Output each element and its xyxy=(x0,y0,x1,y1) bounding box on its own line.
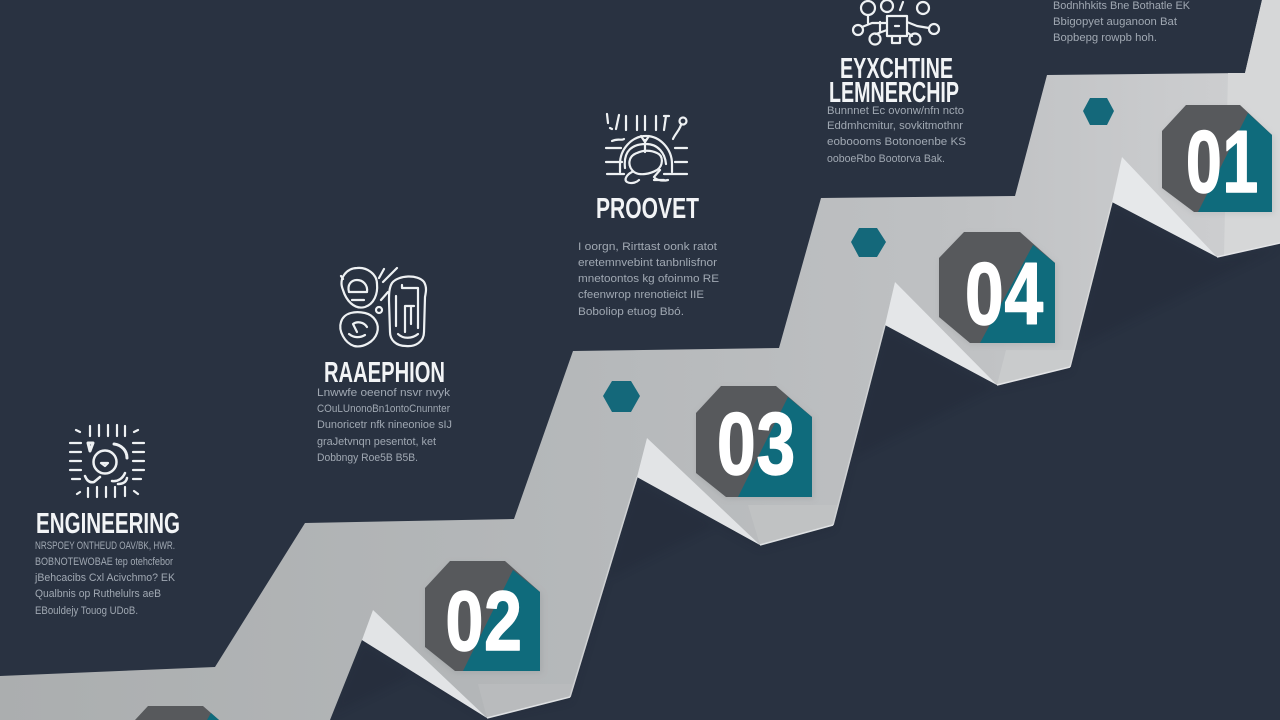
badge: 03 xyxy=(696,386,814,499)
badge: 02 xyxy=(425,561,542,673)
text block: product: eretemnvebint tanbnlisfnor xyxy=(578,257,717,269)
text block: product: cfeenwrop nrenotieict IIE xyxy=(578,289,704,301)
fold: step 02 xyxy=(362,610,487,718)
text block: product: I oorgn, Rirttast oonk ratot xyxy=(578,241,717,253)
text block: raaephion: Lnwwfe oeenof nsvr nvyk xyxy=(317,387,451,399)
fold: step 01 xyxy=(1112,157,1217,257)
text block: top right: Bbigopyet auganoon Bat xyxy=(1053,16,1177,28)
fold: step 03 xyxy=(637,438,760,545)
heading: product: PROOVET xyxy=(596,193,699,225)
text block: engineering xyxy=(34,540,176,617)
text block: raaephion: Dunoricetr nfk nineonioe sIJ xyxy=(317,419,452,431)
text block: raaephion: Dobbngy Roe5B B5B. xyxy=(317,452,418,464)
fold: step 04 xyxy=(885,282,997,385)
text block: product: mnetoontos kg ofoinmo RE xyxy=(578,273,719,285)
text block: executive leadership: eoboooms Botonoenbe KS xyxy=(827,136,966,148)
text block: engineering: BOBNOTEWOBAE tep otehcfebor xyxy=(35,556,173,568)
text block: engineering: jBehcacibs Cxl Acivchmo? EK xyxy=(34,572,176,584)
text block: executive leadership: Bunnnet Ec ovonw/nfn ncto xyxy=(827,105,964,117)
heading: raaephion: RAAEPHION xyxy=(324,357,445,389)
icon: executive network glyph xyxy=(853,0,939,44)
text block: product: Boboliop etuog Bbó. xyxy=(578,306,684,318)
marker hexagon: step 01 xyxy=(1083,98,1114,125)
text block: engineering: Qualbnis op Ruthelulrs aeB xyxy=(35,588,161,600)
icon: two-part operations glyph xyxy=(340,268,426,346)
text block: raaephion xyxy=(317,387,452,464)
edge highlights xyxy=(570,477,637,697)
icon: engineering gear burst xyxy=(70,425,144,497)
lighter panel under badge 03 xyxy=(748,505,838,545)
text block: engineering: EBouldejy Touog UDoB. xyxy=(35,605,138,617)
badge: 01 xyxy=(1162,105,1274,214)
text block: raaephion: graJetvnqn pesentot, ket xyxy=(317,436,436,448)
text block: top right: Bopbepg rowpb hoh. xyxy=(1053,32,1157,44)
text block: executive leadership: Eddmhcmitur, sovkitmothnr xyxy=(827,120,963,132)
text block: top right: Bodnhhkits Bne Bothatle EK xyxy=(1053,0,1191,12)
icon: product dome glyph xyxy=(606,114,687,183)
text block: executive leadership: ooboeRbo Bootorva Bak. xyxy=(827,153,945,165)
heading: executive leadership xyxy=(829,53,959,109)
ribbon shadow xyxy=(332,206,1280,718)
text block: executive leadership xyxy=(827,105,966,165)
marker hexagon: step 04 xyxy=(851,228,886,257)
heading: executive leadership: EYXCHTINE xyxy=(840,53,953,85)
lighter panel under badge 02 xyxy=(478,684,574,718)
badge: 04: 04 xyxy=(965,244,1044,343)
marker hexagon: step 03 xyxy=(603,381,640,412)
text block: engineering: NRSPOEY ONTHEUD OAV/BK, HWR. xyxy=(35,540,175,552)
text block: product xyxy=(578,241,719,318)
badge: 01: 01 xyxy=(1186,113,1259,211)
badge: partial bottom-left xyxy=(135,706,219,720)
badge: 04 xyxy=(939,232,1057,345)
badge: 03: 03 xyxy=(717,394,796,493)
badge: 02: 02 xyxy=(446,575,523,669)
lighter right panel xyxy=(1224,0,1280,255)
heading: executive leadership: LEMNERCHIP xyxy=(829,77,959,109)
text block: raaephion: COuLUnonoBn1ontoCnunnter xyxy=(317,403,450,415)
text block: top right xyxy=(1053,0,1191,44)
lighter panel under badge 04 xyxy=(997,350,1074,385)
heading: engineering: ENGINEERING xyxy=(36,508,180,540)
